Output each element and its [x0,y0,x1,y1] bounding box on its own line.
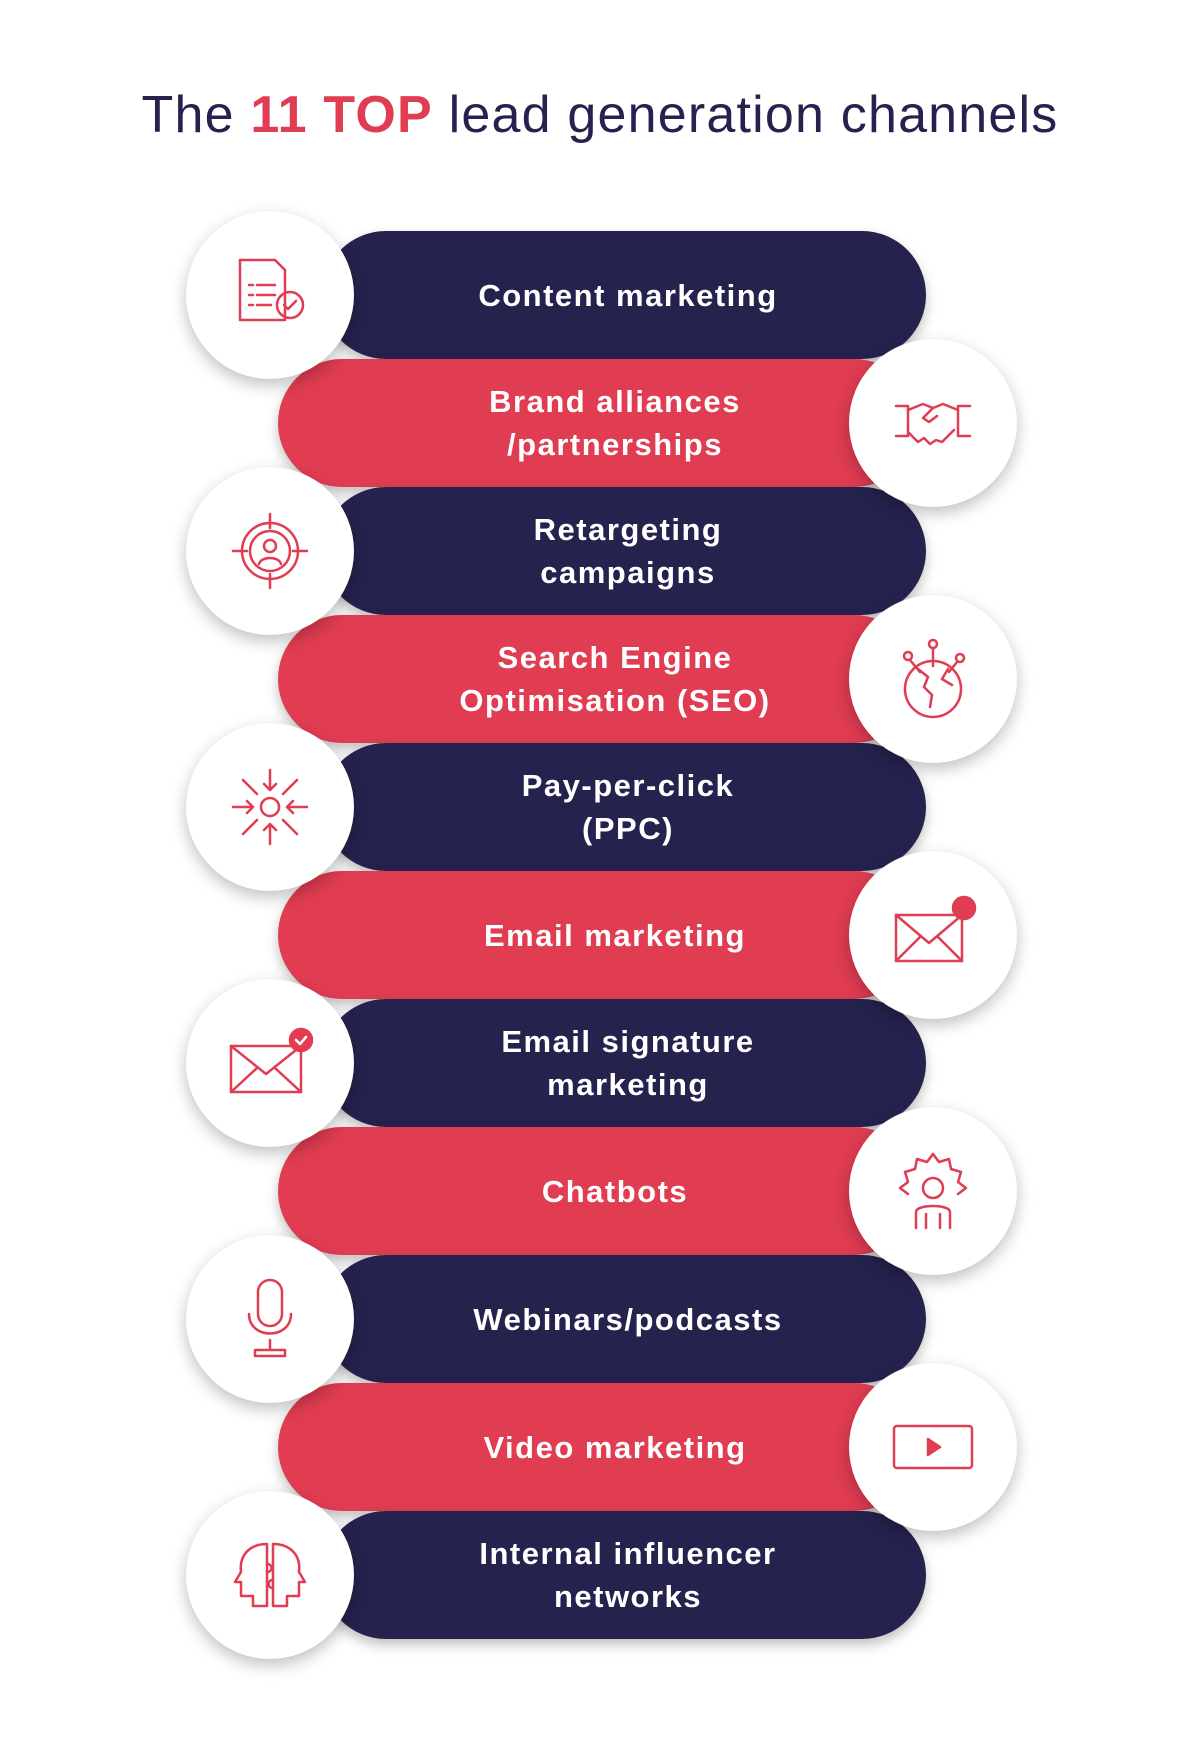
title: The 11 TOP lead generation channels [142,86,1058,144]
bar: content marketing [322,231,926,359]
bar: PPC: (PPC) [582,811,674,846]
icon: play button [849,1363,1017,1531]
bar: email marketing [278,871,918,999]
bar: email signature [322,999,926,1127]
bar: brand alliances: Brand alliances [489,384,741,419]
bar: chatbots [278,1127,918,1255]
bar: email marketing: Email marketing [484,918,746,952]
icon: gear person [849,1107,1017,1275]
bar: PPC [322,743,926,871]
bar: chatbots: Chatbots [542,1174,688,1208]
icon: email megaphone [849,851,1017,1019]
icon: converge arrows [186,723,354,891]
icon: document check [186,211,354,379]
bar: video [278,1383,918,1511]
bar: SEO: Optimisation (SEO) [459,683,771,718]
icon: microphone [186,1235,354,1403]
bar: brand alliances [278,359,918,487]
bar: influencer: networks [554,1579,702,1614]
bar: SEO [278,615,918,743]
bar: video: Video marketing [483,1430,747,1464]
icon: target [186,467,354,635]
bar: webinars [322,1255,926,1383]
bar: retargeting: campaigns [540,555,716,590]
bar: email signature: Email signature [501,1024,755,1059]
bar: retargeting [322,487,926,615]
icon: handshake [849,339,1017,507]
bar: email signature: marketing [547,1067,709,1102]
bar: webinars: Webinars/podcasts [473,1302,783,1336]
bar: PPC: Pay-per-click [522,768,734,803]
bar: influencer: Internal influencer [479,1536,777,1571]
bar: influencer [322,1511,926,1639]
bar: brand alliances: /partnerships [507,427,723,462]
icon: email check [186,979,354,1147]
icon: globe [849,595,1017,763]
bar: content marketing: Content marketing [478,278,778,312]
icon: heads puzzle [186,1491,354,1659]
bar: SEO: Search Engine [498,640,732,675]
bar: retargeting: Retargeting [534,512,722,547]
